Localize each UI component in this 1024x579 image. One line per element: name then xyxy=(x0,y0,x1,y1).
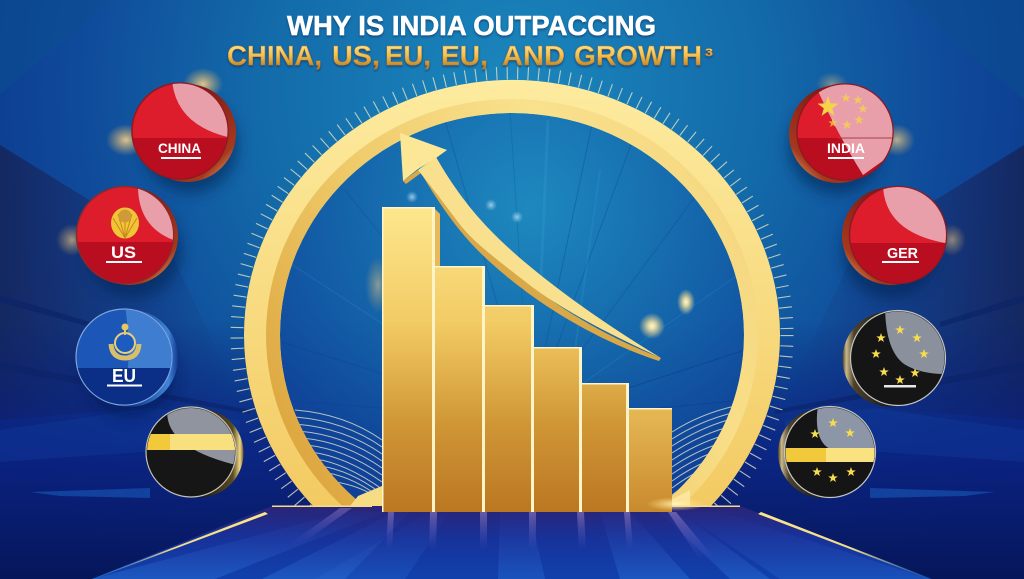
label: EU: EU xyxy=(112,365,136,386)
title line 2: EU, xyxy=(441,40,488,71)
coin: black and yellow with stars, right xyxy=(778,405,880,498)
interior of the ring with sunburst lines xyxy=(280,113,743,499)
coin: India xyxy=(788,72,915,194)
stage floor with light rays xyxy=(92,506,932,579)
coin: US xyxy=(56,186,182,298)
bar 1 xyxy=(382,207,440,512)
title line 2: EU, xyxy=(385,40,431,71)
bar 5 xyxy=(581,383,628,512)
label: GER: GER xyxy=(887,245,918,262)
title line 1: WHY IS INDIA OUTPACCING xyxy=(287,10,656,41)
bar chart xyxy=(272,207,740,512)
bar 2 xyxy=(434,266,484,512)
icon: stars xyxy=(818,93,868,129)
coin: black with stars xyxy=(842,305,950,406)
icon: gold shell emblem xyxy=(111,208,139,238)
label: India: INDIA xyxy=(827,141,865,156)
icon: gold wreath emblem xyxy=(111,324,139,358)
bar 4 xyxy=(533,347,581,512)
coin: EU xyxy=(74,305,180,418)
title line 2: AND xyxy=(502,40,565,71)
title line 2 xyxy=(227,40,713,71)
title line 2: US, xyxy=(332,40,380,71)
coin: China xyxy=(106,68,240,193)
label: China: CHINA xyxy=(158,141,201,156)
tick marks around the ring xyxy=(230,66,794,506)
title xyxy=(227,10,713,71)
coin: black and yellow, left xyxy=(145,405,244,498)
title line 2: GROWTH xyxy=(574,40,702,71)
label: US: US xyxy=(111,243,136,262)
icon: stars ring xyxy=(871,325,929,384)
fine curved lines beside the bars xyxy=(295,406,735,499)
sparkles xyxy=(406,191,695,339)
icon: stars xyxy=(810,418,856,482)
golden ring xyxy=(244,80,780,506)
bar 6 xyxy=(628,408,672,512)
growth arrow xyxy=(400,133,661,361)
coin: GER xyxy=(842,186,966,298)
title line 2: 3 xyxy=(705,47,713,59)
bar 3 xyxy=(484,305,533,512)
title line 2: CHINA, xyxy=(227,40,322,71)
